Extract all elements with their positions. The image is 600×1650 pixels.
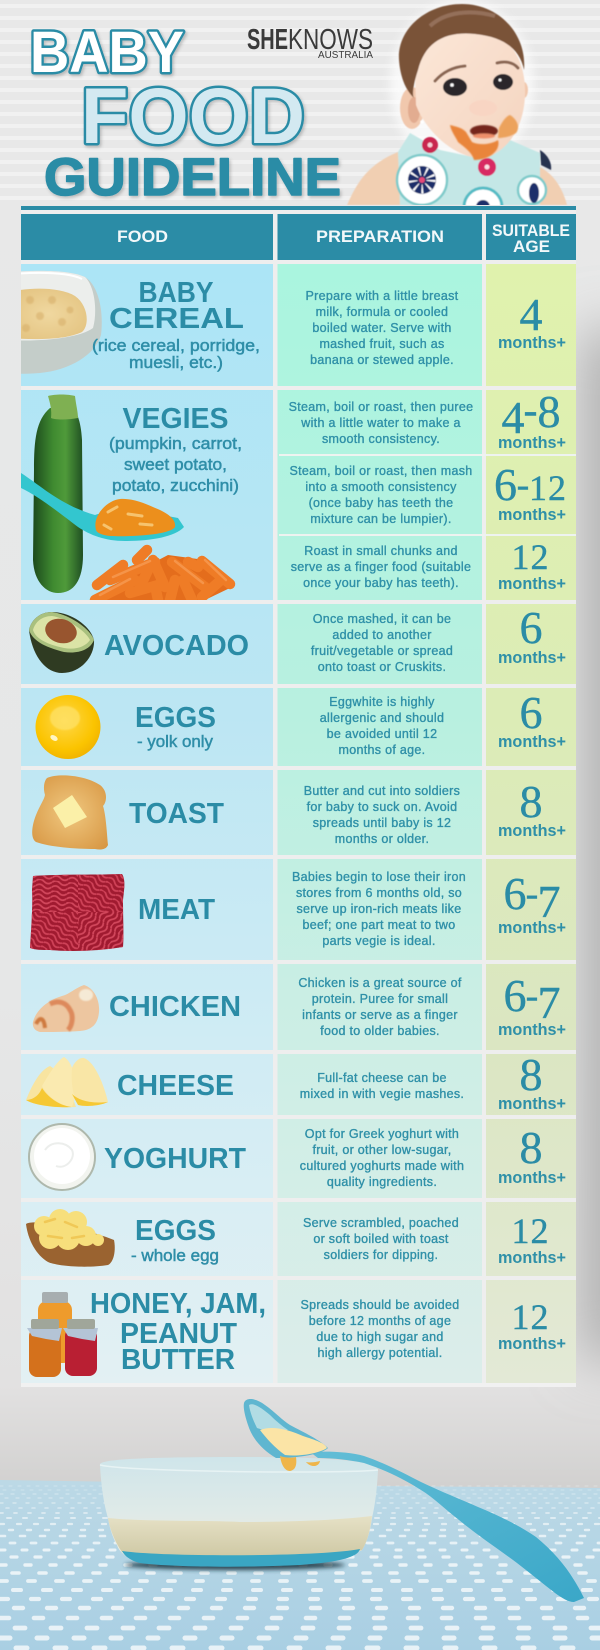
food name: (rice cereal, porridge,	[92, 336, 260, 355]
preparation text	[320, 695, 444, 757]
suitable age: months+	[498, 1021, 566, 1039]
preparation text: Steam, boil or roast, then mash	[290, 464, 472, 478]
preparation text: Babies begin to lose their iron	[292, 870, 466, 884]
preparation text: fruit/vegetable or spread	[311, 644, 453, 658]
suitable age: 7	[538, 876, 560, 927]
food name	[135, 702, 216, 751]
preparation text: banana or stewed apple.	[310, 353, 454, 367]
food name: - whole egg	[131, 1246, 219, 1265]
suitable age: months+	[498, 334, 566, 352]
preparation text: or soft boiled with toast	[313, 1232, 449, 1246]
preparation text: parts vegie is ideal.	[322, 934, 436, 948]
preparation text: food to older babies.	[320, 1024, 440, 1038]
preparation text: Steam, boil or roast, then puree	[289, 400, 473, 414]
suitable age: 6	[520, 687, 542, 738]
suitable age: 4	[520, 289, 542, 340]
row: avocado	[21, 602, 576, 684]
icon: toast with butter	[32, 775, 108, 850]
row: eggs yolk only	[21, 687, 576, 766]
suitable age	[498, 1211, 566, 1267]
suitable age: months+	[498, 575, 566, 593]
preparation text: Roast in small chunks and	[304, 544, 458, 558]
food name: muesli, etc.)	[129, 353, 223, 372]
preparation text: high allergy potential.	[317, 1346, 443, 1360]
table header: FOOD	[117, 227, 168, 246]
food name: PEANUT	[120, 1318, 237, 1350]
icon: cereal bowl	[21, 270, 102, 374]
food name: CHEESE	[117, 1070, 234, 1102]
icon: avocado	[29, 612, 94, 673]
suitable age: 12	[529, 468, 567, 508]
preparation text: boiled water. Serve with	[312, 321, 452, 335]
preparation text: stores from 6 months old, so	[296, 886, 462, 900]
food name: CHICKEN	[109, 991, 241, 1023]
suitable age	[498, 1049, 566, 1113]
preparation text: infants or serve as a finger	[302, 1008, 458, 1022]
suitable age: 6	[520, 602, 542, 653]
suitable age: 12	[512, 537, 550, 577]
suitable age: months+	[498, 733, 566, 751]
food name	[109, 403, 242, 495]
food name	[131, 1215, 219, 1265]
food name	[90, 1288, 266, 1376]
logo: SheKnows Australia	[247, 24, 373, 61]
food name: EGGS	[135, 702, 216, 734]
suitable age: 12	[512, 1211, 550, 1251]
suitable age	[498, 602, 566, 667]
title	[30, 20, 341, 207]
title: BABY	[30, 20, 184, 85]
food name: VEGIES	[122, 403, 228, 435]
preparation text	[303, 1216, 459, 1262]
suitable age	[498, 1297, 566, 1353]
suitable age: months+	[498, 1169, 566, 1187]
photo: baby with food on face	[347, 0, 567, 226]
suitable age: months+	[498, 822, 566, 840]
food name: BABY	[138, 277, 214, 309]
preparation text: Serve scrambled, poached	[303, 1216, 459, 1230]
food name: (pumpkin, carrot,	[109, 434, 242, 453]
preparation text: due to high sugar and	[316, 1330, 444, 1344]
preparation text: serve as a finger food (suitable	[291, 560, 471, 574]
preparation text: beef; one part meat to two	[302, 918, 456, 932]
suitable age	[498, 1122, 566, 1187]
row: eggs whole egg	[21, 1202, 576, 1276]
preparation text: months or older.	[335, 832, 429, 846]
table header: AGE	[513, 237, 550, 256]
preparation text: cultured yoghurts made with	[300, 1159, 464, 1173]
icon: scrambled egg on toast	[26, 1209, 115, 1267]
preparation text: soldiers for dipping.	[324, 1248, 438, 1262]
suitable age: months+	[498, 649, 566, 667]
logo: SheKnows Australia: AUSTRALIA	[318, 50, 373, 61]
title: FOOD	[81, 71, 305, 160]
preparation text: (once baby has teeth the	[309, 496, 453, 510]
preparation text: mashed fruit, such as	[319, 337, 445, 351]
preparation text: once your baby has teeth).	[303, 576, 459, 590]
preparation text: Opt for Greek yoghurt with	[305, 1127, 459, 1141]
row: chicken	[21, 964, 576, 1050]
food name: HONEY, JAM,	[90, 1288, 266, 1320]
preparation text	[289, 400, 473, 590]
table header: PREPARATION	[316, 227, 444, 246]
icon: cheese slices	[26, 1057, 108, 1107]
suitable age: 8	[520, 1122, 542, 1173]
row: baby cereal	[10, 264, 576, 386]
preparation text: Prepare with a little breast	[306, 289, 459, 303]
suitable age: -	[524, 388, 538, 434]
food name: AVOCADO	[104, 630, 249, 662]
food name: - yolk only	[137, 732, 213, 751]
tablecloth with dots	[0, 1480, 600, 1650]
suitable age	[498, 687, 566, 751]
preparation text	[306, 289, 459, 367]
food name: EGGS	[135, 1215, 216, 1247]
preparation text	[300, 1071, 464, 1101]
food name: MEAT	[138, 894, 215, 926]
preparation text: Spreads should be avoided	[300, 1298, 460, 1312]
suitable age: -	[526, 873, 538, 915]
suitable age	[498, 868, 566, 937]
suitable age: 8	[520, 1049, 542, 1100]
table base	[21, 210, 576, 1387]
icon: minced meat	[28, 872, 126, 954]
preparation text: allergenic and should	[320, 711, 444, 725]
suitable age: 6	[504, 970, 526, 1021]
suitable age	[498, 970, 566, 1039]
preparation text: smooth consistency.	[322, 432, 440, 446]
spoon	[244, 1399, 584, 1602]
preparation text	[292, 870, 466, 948]
preparation text	[298, 976, 462, 1038]
preparation text: Once mashed, it can be	[313, 612, 451, 626]
preparation text: added to another	[332, 628, 432, 642]
suitable age	[498, 289, 566, 352]
food name: potato, zucchini)	[112, 476, 239, 495]
suitable age: months+	[498, 1249, 566, 1267]
preparation text: months of age.	[339, 743, 425, 757]
preparation text: Butter and cut into soldiers	[304, 784, 460, 798]
icon: chicken piece	[33, 985, 99, 1032]
suitable age: -	[526, 975, 538, 1017]
row: vegies	[21, 386, 576, 600]
table header	[21, 214, 576, 260]
food name: TOAST	[129, 798, 224, 830]
preparation text: into a smooth consistency	[305, 480, 457, 494]
preparation text: Full-fat cheese can be	[317, 1071, 447, 1085]
suitable age: 4	[502, 392, 524, 443]
icon: yoghurt bowl	[29, 1124, 95, 1190]
suitable age	[494, 386, 567, 593]
suitable age: 8	[520, 776, 542, 827]
suitable age: months+	[498, 1095, 566, 1113]
preparation text: fruit, or other low-sugar,	[312, 1143, 452, 1157]
background stripes	[0, 4, 600, 200]
preparation text: serve up iron-rich meats like	[296, 902, 462, 916]
row: yoghurt	[21, 1119, 576, 1198]
preparation text: before 12 months of age	[309, 1314, 451, 1328]
preparation text: onto toast or Cruskits.	[318, 660, 446, 674]
title: GUIDELINE	[44, 148, 341, 207]
suitable age: 12	[512, 1297, 550, 1337]
suitable age	[498, 776, 566, 840]
food name: CEREAL	[109, 303, 244, 335]
preparation text: Eggwhite is highly	[329, 695, 435, 709]
preparation text: be avoided until 12	[327, 727, 437, 741]
preparation text	[311, 612, 453, 674]
preparation text: quality ingredients.	[327, 1175, 437, 1189]
preparation text: protein. Puree for small	[312, 992, 448, 1006]
top rule	[21, 206, 576, 210]
food name: sweet potato,	[124, 455, 227, 474]
icon: egg yolk	[36, 695, 100, 759]
bowl of baby food	[100, 1457, 378, 1567]
suitable age: 6	[494, 459, 517, 510]
icon: zucchini, spoon of puree, carrots	[21, 394, 234, 600]
food name	[92, 277, 260, 372]
suitable age: 7	[538, 977, 560, 1028]
suitable age: 8	[538, 386, 560, 437]
row: meat	[21, 859, 576, 960]
food name: YOGHURT	[104, 1143, 246, 1175]
table header: SUITABLE	[492, 221, 570, 240]
suitable age: months+	[498, 506, 566, 524]
table bottom rule	[21, 1383, 576, 1387]
row: cheese	[21, 1049, 576, 1115]
preparation text: mixed in with vegie mashes.	[300, 1087, 464, 1101]
preparation text: Chicken is a great source of	[298, 976, 462, 990]
preparation text: mixture can be lumpier).	[310, 512, 452, 526]
bowl shadow	[125, 1560, 345, 1570]
logo: SheKnows Australia: SHE	[247, 24, 288, 56]
preparation text	[300, 1298, 460, 1360]
preparation text: milk, formula or cooled	[316, 305, 448, 319]
logo: SheKnows Australia: KNOWS	[288, 24, 373, 56]
suitable age: months+	[498, 434, 566, 452]
suitable age: months+	[498, 1335, 566, 1353]
suitable age: months+	[498, 919, 566, 937]
icon: jars	[27, 1292, 98, 1377]
row: toast	[21, 770, 576, 855]
suitable age: -	[517, 464, 529, 506]
suitable age: 6	[504, 868, 526, 919]
food name: BUTTER	[121, 1344, 235, 1376]
row: honey, jam, peanut butter	[21, 1280, 576, 1383]
preparation text	[304, 784, 460, 846]
preparation text: spreads until baby is 12	[313, 816, 451, 830]
preparation text: with a little water to make a	[300, 416, 461, 430]
preparation text: for baby to suck on. Avoid	[307, 800, 457, 814]
preparation text	[300, 1127, 464, 1189]
